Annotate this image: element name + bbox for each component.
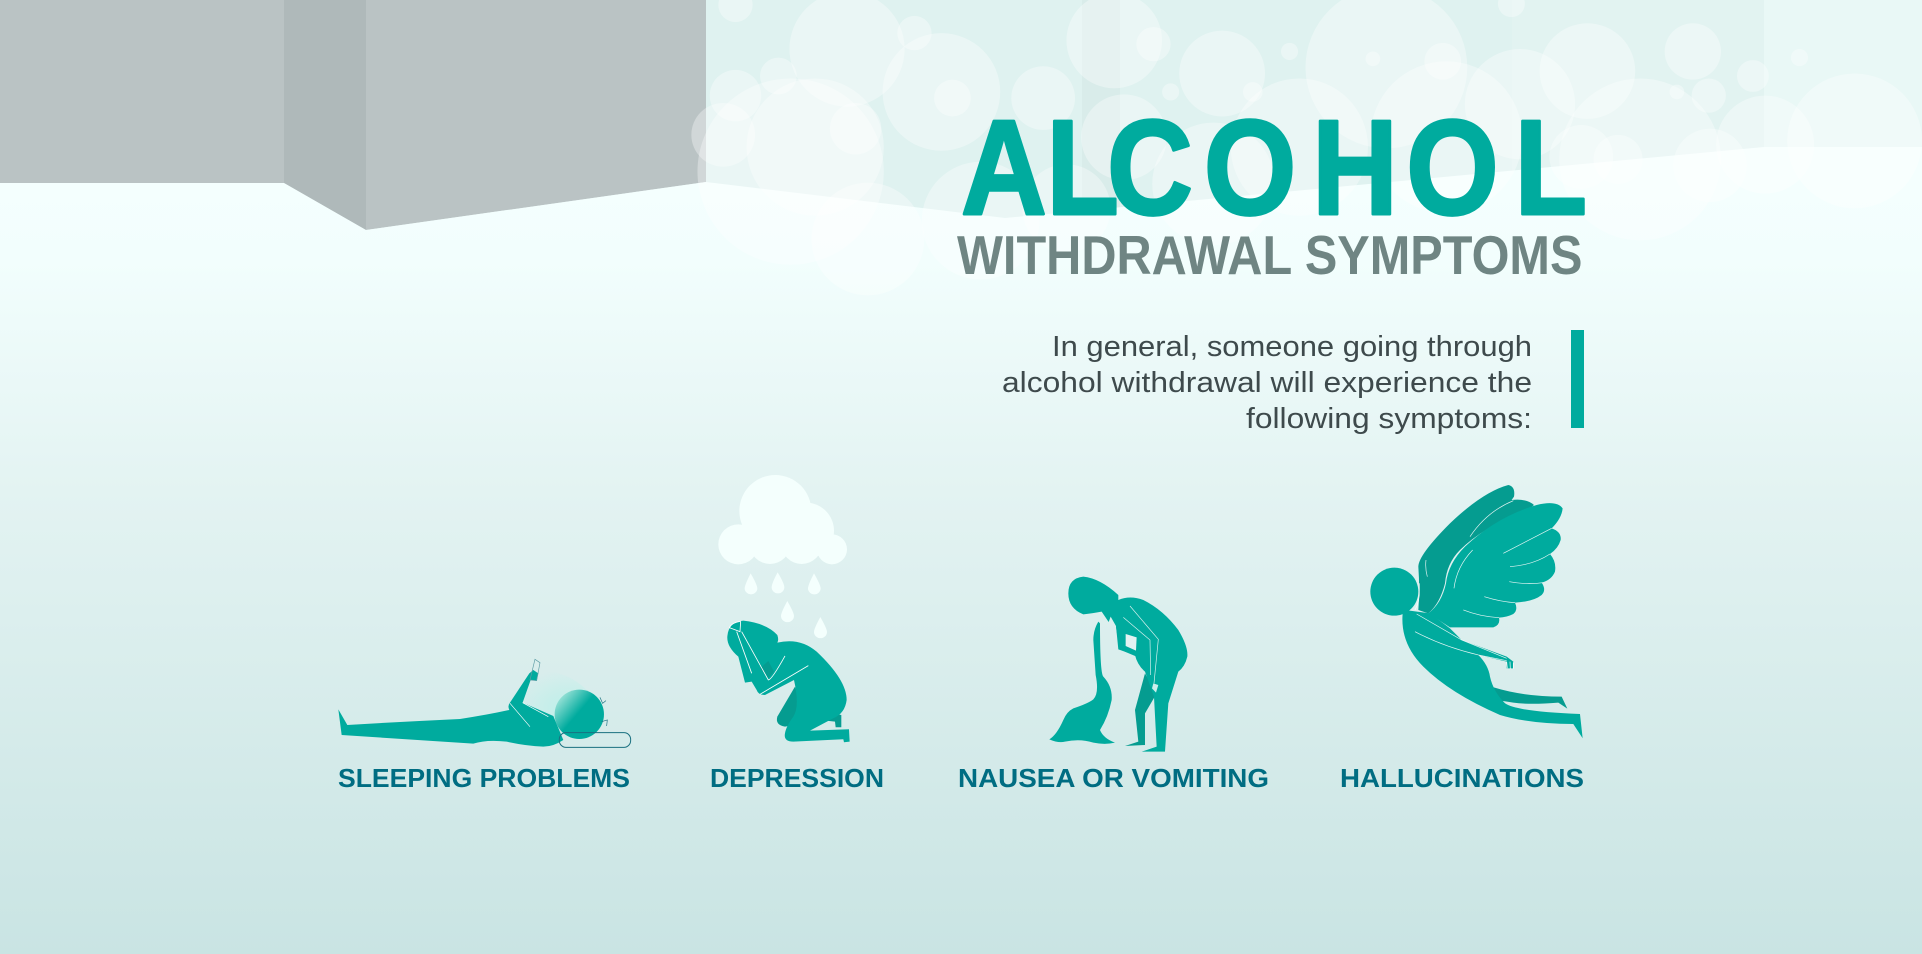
- symptom: hallucinations: [1340, 485, 1584, 793]
- label: depression: DEPRESSION: [710, 763, 884, 793]
- title: ALCOHOL: ALCOHOL: [961, 92, 1587, 243]
- symptom: sleeping problems: [338, 659, 631, 793]
- back wall: [700, 0, 1922, 240]
- intro paragraph: In general, someone going through: [1052, 331, 1532, 363]
- intro paragraph: following symptoms:: [1246, 403, 1532, 435]
- label: sleeping problems: SLEEPING PROBLEMS: [338, 763, 630, 793]
- symptom: depression: [710, 475, 884, 793]
- symptom: nausea or vomiting: [958, 577, 1269, 793]
- icon: winged figure: [1370, 485, 1583, 738]
- icon: person lying with phone: [338, 659, 631, 747]
- icon: crouching figure: [727, 621, 850, 742]
- icon: cloud and rain: [718, 475, 847, 638]
- icon: vomiting figure: [1049, 577, 1187, 752]
- accent bar: [1571, 330, 1584, 428]
- intro paragraph: [1002, 331, 1532, 435]
- subtitle: WITHDRAWAL SYMPTOMS: WITHDRAWAL SYMPTOMS: [957, 225, 1582, 287]
- bubbles: [691, 0, 1922, 295]
- label: hallucinations: HALLUCINATIONS: [1340, 763, 1584, 793]
- grey wall block: [0, 0, 706, 230]
- intro paragraph: alcohol withdrawal will experience the: [1002, 367, 1532, 399]
- label: nausea or vomiting: NAUSEA OR VOMITING: [958, 763, 1269, 793]
